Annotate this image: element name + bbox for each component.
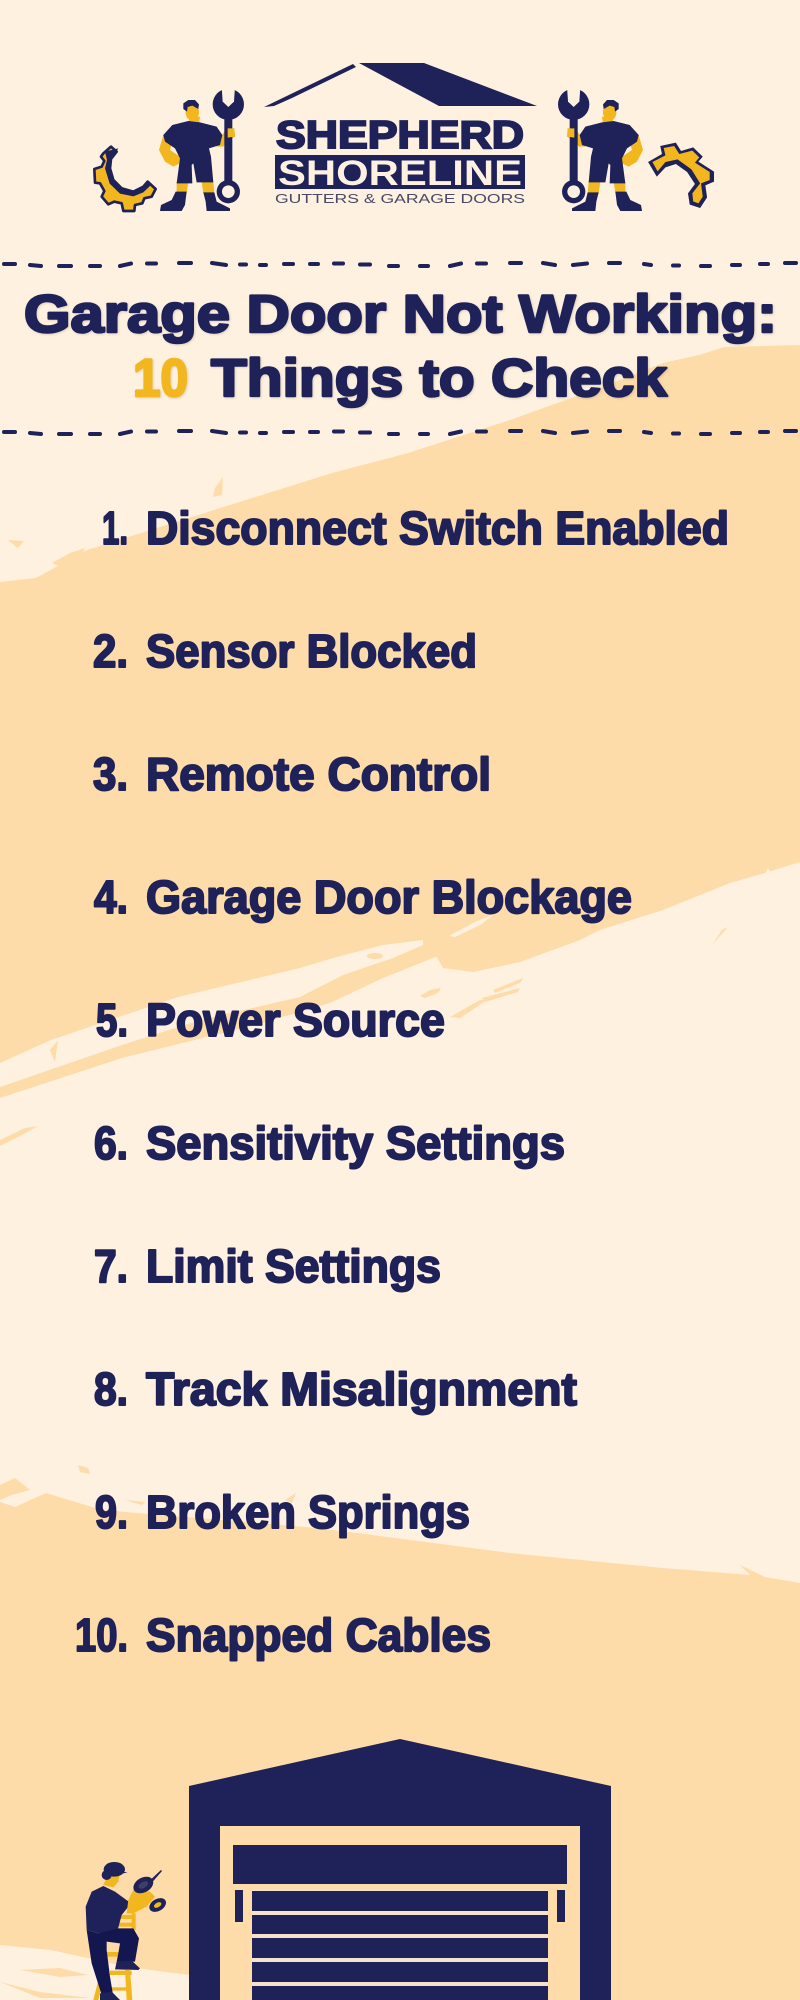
item 9: Broken Springs <box>146 1486 470 1538</box>
item 3: 3. <box>93 748 128 800</box>
logo wordmark: SHORELINE banner: SHORELINE <box>278 154 522 193</box>
item 8: Track Misalignment <box>146 1363 577 1415</box>
icon: left mechanic with wrench <box>159 87 244 211</box>
item 5: Power Source <box>146 994 445 1046</box>
item 5: 5. <box>96 994 128 1046</box>
item 9: 9. <box>95 1486 128 1538</box>
item 8: 8. <box>94 1363 128 1415</box>
item 6: Sensitivity Settings <box>146 1117 565 1169</box>
item 7: Limit Settings <box>146 1240 441 1292</box>
illustration: worker on ladder with drill <box>86 1862 168 2000</box>
item 3: Remote Control <box>146 748 491 800</box>
item 1: 1. <box>102 502 128 554</box>
item 1: Disconnect Switch Enabled <box>146 502 729 554</box>
item 10: Snapped Cables <box>146 1609 491 1661</box>
item 2: Sensor Blocked <box>146 625 477 677</box>
item 7: 7. <box>94 1240 128 1292</box>
item 4: Garage Door Blockage <box>146 871 632 923</box>
ladder <box>93 1913 136 2000</box>
checklist <box>75 502 729 1661</box>
logo roof <box>264 63 537 107</box>
icon: right mechanic with wrench <box>558 87 643 211</box>
item 6: 6. <box>94 1117 128 1169</box>
divider: top dashed line <box>4 263 796 266</box>
item 4: 4. <box>94 871 128 923</box>
icon: right gear <box>648 143 714 208</box>
title line 1: Garage Door Not Working: <box>24 285 777 344</box>
item 2: 2. <box>93 625 128 677</box>
drill <box>130 1870 168 1915</box>
illustration: garage building with roller door <box>189 1739 611 2000</box>
worker body <box>86 1862 155 2000</box>
logo tagline: GUTTERS & GARAGE DOORS <box>275 191 525 206</box>
divider: bottom dashed line <box>4 431 796 434</box>
logo wordmark: SHEPHERD: SHEPHERD <box>276 114 524 157</box>
item 10: 10. <box>75 1609 128 1661</box>
title line 2 number: 10 <box>133 349 188 408</box>
icon: left gear <box>94 147 156 211</box>
logo: Shepherd Shoreline <box>94 63 714 211</box>
title line 2 text: Things to Check <box>211 349 668 408</box>
title <box>24 285 777 408</box>
